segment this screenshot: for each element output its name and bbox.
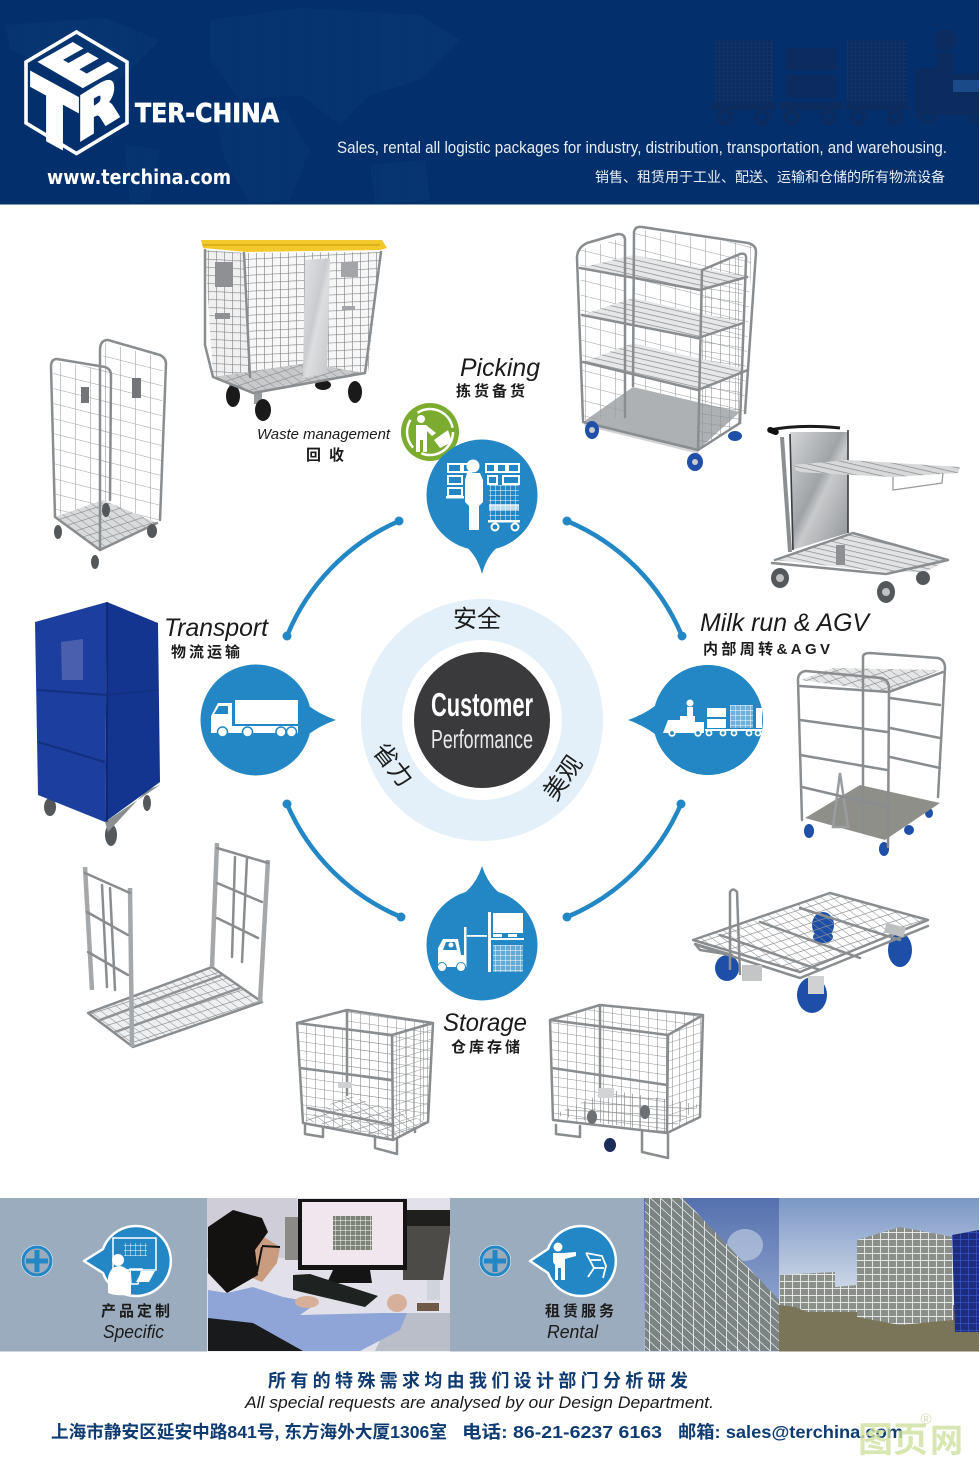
- train icon: [663, 700, 762, 736]
- brand name: TER-CHINA: [135, 99, 279, 129]
- watermark: ®: [920, 1411, 932, 1428]
- label: specific: [101, 1302, 173, 1342]
- website: www.terchina.com: [47, 165, 231, 189]
- label: milk run: Milk run & AGV: [700, 609, 871, 637]
- plus icon two: [480, 1246, 510, 1276]
- truck icon: [211, 700, 298, 737]
- label: picking: Picking: [460, 354, 540, 382]
- product: stacking rack: [85, 843, 268, 1047]
- label: transport: Transport: [164, 614, 269, 642]
- product: dolly: [693, 890, 928, 1013]
- label: milk run: 内部周转&AGV: [703, 640, 830, 658]
- label: storage: Storage: [443, 1009, 527, 1037]
- product: shelf trolley: [577, 227, 756, 471]
- product: waste cage cart: [201, 240, 387, 421]
- label window: [61, 639, 83, 680]
- watermark: 网: [930, 1422, 963, 1459]
- label: specific: 产品定制: [101, 1302, 173, 1320]
- slogan chinese: 销售、租赁用于工业、配送、运输和仓储的所有物流设备: [595, 169, 945, 185]
- photo: yard with stacked cages: [779, 1198, 979, 1352]
- ring label: effort: 省力: [367, 738, 418, 793]
- label: rental: Rental: [547, 1322, 599, 1342]
- label: waste management: Waste management: [257, 427, 391, 443]
- value ring: [361, 599, 603, 841]
- pin: specific: [84, 1226, 171, 1296]
- label: transport: 物流运输: [171, 643, 243, 661]
- contact line: 电话: 86-21-6237 6163: [462, 1422, 662, 1442]
- contact line: [51, 1422, 903, 1442]
- label: waste management: 回收: [306, 447, 352, 464]
- product: picking cart: [766, 426, 960, 603]
- picking icon: [446, 460, 520, 530]
- ring label: appearance: 美观: [539, 751, 588, 806]
- pin: storage: [426, 866, 538, 1000]
- center disc: Performance: [431, 724, 533, 754]
- photo: designer at workstation: [207, 1198, 450, 1352]
- pin: transport: [200, 664, 336, 776]
- product: roll cage: [51, 340, 166, 569]
- label: picking: 拣货备货: [456, 382, 528, 400]
- product: storage cage left: [297, 1010, 433, 1154]
- pin: picking: [426, 440, 538, 574]
- closing statement english: All special requests are analysed by our Design Department.: [244, 1394, 714, 1412]
- lower platform: [775, 533, 948, 572]
- wheels: [226, 378, 362, 421]
- logo mark: E: [22, 34, 135, 98]
- label: picking: [456, 354, 540, 400]
- label: milk run: [700, 609, 871, 658]
- pin: milk run: [628, 665, 763, 775]
- center disc: Customer: [431, 686, 533, 723]
- label: transport: [164, 614, 269, 661]
- forklift and rack icon: [438, 912, 524, 972]
- top shelf: [793, 460, 960, 477]
- wheels: [54, 503, 157, 569]
- header band: [0, 0, 980, 204]
- logo mark: R: [77, 62, 119, 156]
- watermark: 图页: [858, 1421, 928, 1460]
- label: specific: Specific: [103, 1322, 164, 1342]
- watermark: [858, 1411, 963, 1460]
- ring label: safety: 安全: [453, 606, 501, 633]
- label: waste management: [257, 427, 391, 464]
- logo mark: T: [32, 60, 77, 175]
- wheels: [585, 421, 742, 471]
- handle: [730, 890, 740, 975]
- label: rental: [545, 1302, 617, 1342]
- photo: stacked cages against sky: [644, 1198, 779, 1352]
- closing statement chinese: 所有的特殊需求均由我们设计部门分析研发: [268, 1370, 688, 1391]
- plus icon one: [22, 1246, 52, 1276]
- label: storage: [443, 1009, 527, 1056]
- center disc: [414, 652, 550, 788]
- shelves: [580, 255, 748, 390]
- wheels: [771, 568, 930, 603]
- icon: recycle badge: [401, 403, 459, 461]
- central diagram: [282, 516, 686, 922]
- label: rental: 租赁服务: [545, 1302, 617, 1320]
- yellow lid: [201, 240, 387, 252]
- bottom services band: [0, 1198, 980, 1352]
- contact line: 上海市静安区延安中路841号, 东方海外大厦1306室: [51, 1422, 447, 1442]
- logo mark: [22, 32, 135, 175]
- pin: rental: [530, 1226, 616, 1296]
- label: storage: 仓库存储: [451, 1038, 523, 1056]
- contact line: 邮箱: sales@terchina.com: [678, 1422, 903, 1442]
- product: flat shelf cart: [798, 653, 945, 856]
- product: blue covered cage: [35, 602, 160, 846]
- connector arcs: [287, 521, 682, 917]
- faint train silhouette: [713, 29, 980, 123]
- world map background: [5, 8, 460, 204]
- base: [583, 387, 740, 450]
- product: storage cage right: [550, 1005, 703, 1158]
